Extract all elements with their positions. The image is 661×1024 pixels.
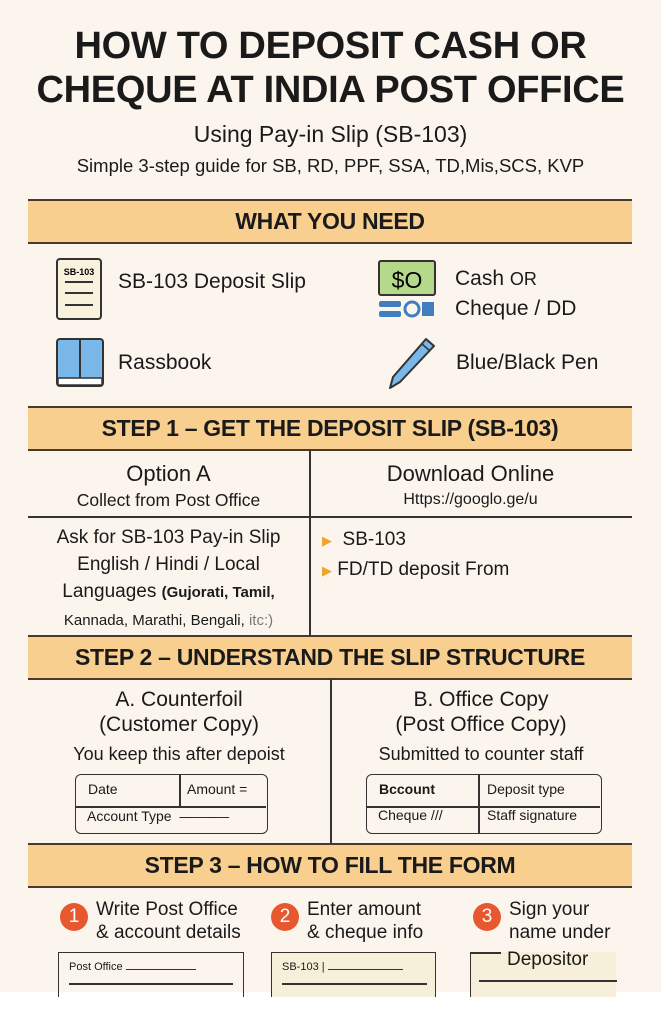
label: Cheque / DD	[455, 297, 576, 320]
option A text	[56, 527, 280, 629]
form 2	[271, 952, 436, 997]
option A header: Collect from Post Office	[77, 490, 260, 510]
office copy: B. Office Copy	[413, 688, 548, 711]
option A text: Ask for SB-103 Pay-in Slip	[57, 527, 280, 548]
counterfoil	[73, 688, 285, 764]
counterfoil table: Amount =	[187, 781, 247, 797]
label	[455, 267, 576, 320]
icon: pen	[389, 338, 435, 389]
banner: step 2: STEP 2 – UNDERSTAND THE SLIP STRUCTURE	[75, 644, 585, 670]
office copy table: Staff signature	[487, 807, 577, 823]
step 3.3	[470, 899, 617, 997]
step 3.1: 1	[69, 906, 79, 927]
banner: step 3	[28, 843, 632, 888]
icon: slip: SB-103	[64, 267, 94, 277]
step 3.3: name under	[509, 922, 610, 943]
banner: step 1	[28, 406, 632, 451]
item: cash or cheque	[378, 260, 576, 320]
step 3.2: Enter amount	[307, 899, 421, 920]
label: Blue/Black Pen	[456, 351, 598, 374]
office copy: Submitted to counter staff	[379, 744, 583, 764]
counterfoil table: Date	[88, 781, 118, 797]
counterfoil: A. Counterfoil	[115, 688, 243, 711]
option A text: Languages (Gujorati, Tamil,	[62, 581, 275, 602]
step 3.3: Sign your	[509, 899, 589, 920]
counterfoil: (Customer Copy)	[99, 713, 259, 736]
option A text: Kannada, Marathi, Bengali, itc:)	[64, 612, 273, 629]
download online header: Download Online	[387, 461, 554, 486]
icon: passbook	[56, 338, 104, 387]
option A text: English / Hindi / Local	[77, 554, 260, 575]
step 3.2: & cheque info	[307, 922, 423, 943]
banner: step 2	[28, 635, 632, 680]
item: deposit slip	[56, 258, 306, 320]
icon: cash: $O	[392, 267, 422, 293]
item: passbook	[56, 338, 212, 387]
download list: ▶ SB-103	[322, 529, 406, 550]
step 3.1: Write Post Office	[96, 899, 238, 920]
banner: step 1: STEP 1 – GET THE DEPOSIT SLIP (SB-103)	[102, 415, 558, 441]
form 1	[58, 952, 244, 997]
download list: ▶ FD/TD deposit From	[322, 559, 509, 580]
option A header	[77, 461, 260, 510]
form 2: SB-103 |	[282, 961, 325, 973]
download list	[322, 529, 509, 580]
download online header: Https://googlo.ge/u	[403, 491, 538, 508]
label: SB-103 Deposit Slip	[118, 270, 306, 293]
step 3.2: 2	[280, 906, 290, 927]
tagline: Simple 3-step guide for SB, RD, PPF, SSA, TD,Mis,SCS, KVP	[77, 155, 584, 176]
office copy	[379, 688, 584, 764]
office copy table: Cheque ///	[378, 807, 443, 823]
banner: what you need: WHAT YOU NEED	[235, 208, 425, 234]
title: HOW TO DEPOSIT CASH OR	[74, 25, 587, 67]
title	[37, 25, 624, 111]
label: Rassbook	[118, 351, 211, 374]
form 1: Post Office	[69, 961, 123, 973]
title: CHEQUE AT INDIA POST OFFICE	[37, 69, 624, 111]
subtitle: Using Pay-in Slip (SB-103)	[194, 121, 467, 147]
step 3.1: & account details	[96, 922, 241, 943]
banner: what you need	[28, 199, 632, 244]
office copy table: Deposit type	[487, 781, 565, 797]
download online header	[387, 461, 554, 508]
counterfoil table: Account Type ———–	[87, 808, 229, 824]
step 3.1	[58, 899, 244, 997]
form 3	[470, 952, 616, 997]
banner: step 3: STEP 3 – HOW TO FILL THE FORM	[145, 852, 515, 878]
form 3: Depositor	[507, 949, 588, 970]
label: Cash OR	[455, 267, 537, 290]
office copy: (Post Office Copy)	[395, 713, 567, 736]
icon: slip	[56, 258, 102, 320]
counterfoil table	[75, 774, 268, 834]
option A header: Option A	[126, 461, 211, 486]
office copy table	[366, 774, 602, 834]
item: pen	[389, 338, 598, 389]
icon: cash	[378, 260, 436, 318]
office copy table: Bccount	[379, 781, 435, 797]
step 3.3: 3	[482, 906, 492, 927]
step 3.2	[271, 899, 436, 997]
counterfoil: You keep this after depoist	[73, 744, 285, 764]
